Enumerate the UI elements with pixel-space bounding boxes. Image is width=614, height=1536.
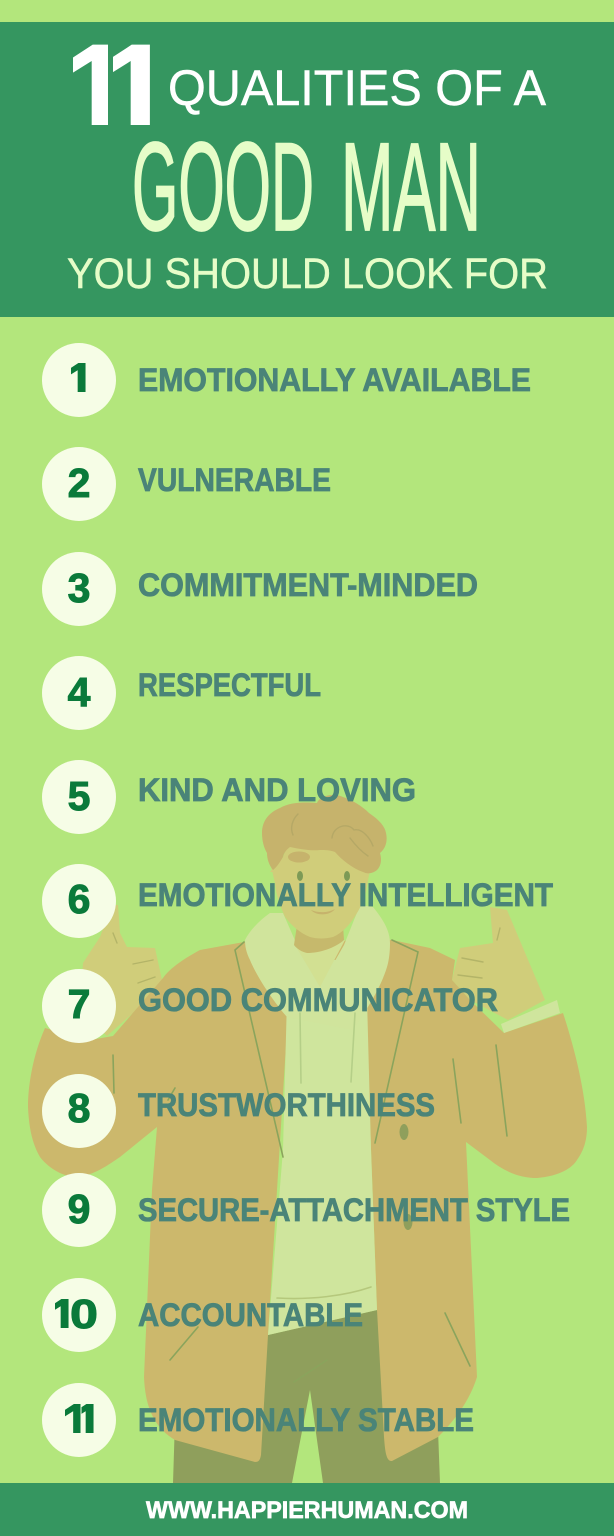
pants (173, 1310, 440, 1483)
item 2: VULNERABLE (138, 462, 331, 498)
face details (288, 814, 373, 914)
item 2: 2 (68, 460, 90, 506)
item 8: TRUSTWORTHINESS (138, 1087, 435, 1123)
item 1: 1 (66, 353, 94, 409)
website url: WWW.HAPPIERHUMAN.COM (146, 1497, 468, 1524)
item 6: EMOTIONALLY INTELLIGENT (138, 877, 553, 913)
item 7 (42, 969, 498, 1043)
item 11 (42, 1383, 474, 1457)
item 2 (42, 447, 331, 521)
item 4 (42, 656, 321, 730)
face (270, 862, 372, 938)
item 9 (42, 1173, 570, 1247)
item 9: 9 (68, 1186, 90, 1232)
item 10: 1 (50, 1289, 77, 1345)
item 10 (42, 1278, 363, 1352)
item 4: 4 (68, 669, 91, 715)
item 4: RESPECTFUL (138, 667, 321, 703)
item 1 (42, 343, 531, 417)
title line: you should look for: YOU SHOULD LOOK FOR (67, 250, 548, 298)
illustration: man giving thumbs up (28, 795, 587, 1483)
item 1: EMOTIONALLY AVAILABLE (138, 362, 531, 398)
item 3 (42, 552, 478, 626)
scarf (245, 905, 390, 1030)
title line: good man: MAN (341, 118, 481, 257)
item 10: 0 (70, 1291, 98, 1337)
chest under neck (295, 940, 345, 987)
item 10: ACCOUNTABLE (138, 1297, 363, 1333)
footer band (0, 1483, 614, 1536)
item 7: GOOD COMMUNICATOR (138, 982, 498, 1018)
item 6 (42, 864, 553, 938)
shirt (268, 960, 377, 1335)
header band (0, 14, 614, 317)
right cuff (501, 1000, 560, 1033)
item 3: COMMITMENT-MINDED (138, 567, 478, 603)
jacket (28, 940, 587, 1462)
item 5: KIND AND LOVING (138, 772, 416, 808)
left hand (80, 905, 162, 1036)
item 5: 5 (68, 773, 90, 819)
item 3: 3 (68, 565, 90, 611)
right hand (452, 907, 545, 1020)
jacket and clothing lines (113, 928, 507, 1382)
item 11: EMOTIONALLY STABLE (138, 1402, 474, 1438)
neck (294, 925, 344, 953)
item 11: 11 (62, 1394, 102, 1450)
title number 11: 11 (59, 14, 176, 171)
item 6: 6 (68, 876, 90, 922)
buttons (400, 1124, 412, 1230)
item 9: SECURE-ATTACHMENT STYLE (138, 1192, 570, 1228)
hair (262, 795, 387, 873)
item 7: 7 (68, 981, 90, 1027)
title line: qualities of a: QUALITIES OF A (168, 60, 547, 116)
title line: good man: GOOD (132, 118, 314, 257)
item 5 (42, 760, 416, 834)
item 8: 8 (68, 1085, 90, 1131)
item 8 (42, 1074, 435, 1148)
